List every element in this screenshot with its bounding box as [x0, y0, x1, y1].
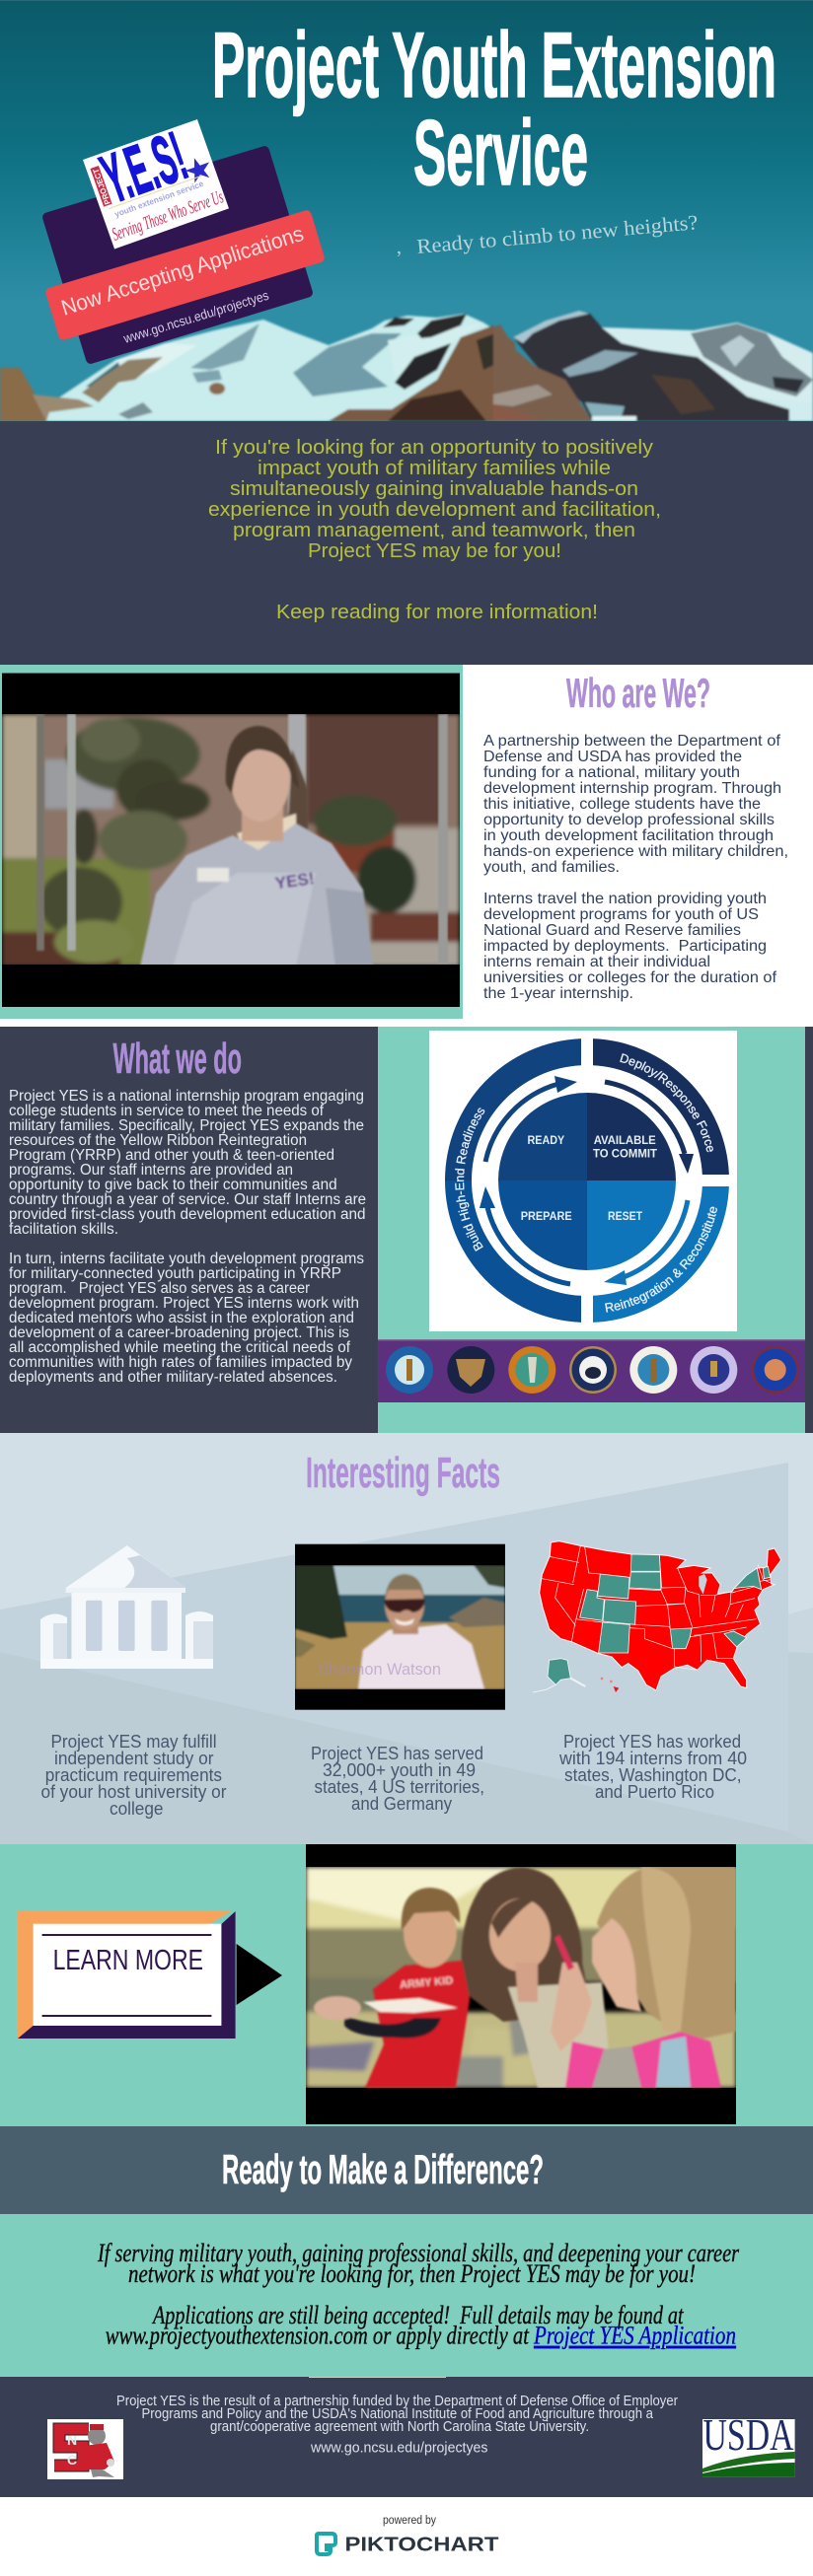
intro text: impact youth of military families while: [258, 458, 611, 479]
footer text: Programs and Policy and the USDA's National Institute of Food and Agriculture through a: [142, 2406, 654, 2422]
text: who are we: youth, and families.: [483, 859, 620, 876]
text: what we do: dedicated mentors who assist in the exploration and: [9, 1310, 354, 1326]
fact text: university credit: college: [110, 1799, 164, 1819]
fact text: university credit: independent study or: [54, 1749, 213, 1768]
chart: readiness cycle: [429, 1031, 737, 1331]
panel: footer: [0, 2377, 813, 2497]
text: what we do: Project YES is a national internship program engaging: [9, 1088, 364, 1105]
intro text: [208, 437, 661, 623]
text: who are we: development internship program. Through: [483, 780, 781, 797]
fact text: interns: states, Washington DC,: [564, 1765, 742, 1785]
boy: [365, 1961, 470, 2088]
title: [212, 13, 776, 204]
text: what we do: country through a year of service. Our staff Interns are: [9, 1191, 366, 1208]
logo: Project YES: Serving Those Who Serve Us: [110, 186, 226, 246]
callout: learn more: [18, 1911, 236, 2039]
intro text: If you're looking for an opportunity to positively: [215, 437, 653, 459]
intro text: simultaneously gaining invaluable hands-on: [230, 478, 638, 500]
text: call to action: [97, 2239, 740, 2350]
military seals band: [378, 1339, 805, 1402]
fact text: university credit: practicum requirements: [45, 1765, 222, 1785]
panel: learn more: [0, 1844, 813, 2126]
fact text: youth served: states, 4 US territories,: [314, 1777, 484, 1797]
fact text: youth served: 32,000+ youth in 49: [323, 1760, 476, 1780]
state borders: [542, 1545, 775, 1670]
video still: intern in sweatshirt: [2, 673, 460, 1007]
logo: Project YES: Y.E.S!: [93, 117, 196, 217]
text: who are we: Interns travel the nation providing youth: [483, 891, 767, 907]
fact text: interns: [558, 1732, 747, 1802]
text: call to action: www.projectyouthextension.com or apply directly at: [106, 2322, 530, 2350]
map: states served: [533, 1541, 781, 1692]
seal: air force reserve: [690, 1346, 737, 1394]
text: who are we: National Guard and Reserve families: [483, 922, 741, 939]
logo: Project YES: PROJECT: [92, 168, 112, 206]
video still: intern with children: ARMY KID: [400, 1974, 454, 1991]
seal: navy: [569, 1346, 617, 1394]
logo: NC State: C: [67, 2452, 77, 2468]
text: what we do: [9, 1088, 366, 1386]
text: who are we: the 1-year internship.: [483, 985, 633, 1002]
seal: army reserve: [447, 1346, 494, 1394]
woman: [462, 1868, 592, 2022]
badge url: www.go.ncsu.edu/projectyes: [121, 288, 270, 346]
panel: video still and who are we: [0, 665, 813, 1027]
fact text: youth served: and Germany: [351, 1794, 452, 1814]
text: what we do: programs. Our staff interns are provided an: [9, 1162, 293, 1179]
intro panel: [0, 421, 813, 665]
text: what we do: development of a career-broadening project. This is: [9, 1324, 349, 1341]
fact text: interns: Project YES has worked: [563, 1732, 741, 1752]
text: what we do: all accomplished while meeting the critical needs of: [9, 1339, 351, 1356]
hero panel: [0, 0, 813, 421]
text: what we do: In turn, interns facilitate youth development programs: [9, 1251, 364, 1267]
cycle arrows: [480, 1076, 694, 1285]
ring labels: Reintegration & Reconstitute: [605, 1207, 717, 1313]
text: what we do: provided first-class youth development education and: [9, 1206, 365, 1223]
seal: coast guard: [752, 1346, 799, 1394]
text: what we do: for military-connected youth participating in YRRP: [9, 1265, 341, 1282]
seal: air national guard: [629, 1346, 677, 1394]
fact text: university credit: Project YES may fulfill: [51, 1732, 217, 1752]
quadrant labels: READY: [527, 1135, 564, 1147]
text: what we do: development program. Project YES interns work with: [9, 1295, 359, 1312]
quadrant labels: AVAILABLE: [594, 1135, 656, 1147]
intro text: program management, and teamwork, then: [233, 520, 635, 541]
text: who are we: opportunity to develop professional skills: [483, 812, 775, 828]
badge banner: Now Accepting Applications: [58, 221, 307, 321]
intro text: experience in youth development and facilitation,: [208, 499, 661, 521]
arrow: [237, 1944, 282, 2005]
powered by: powered by: [383, 2515, 436, 2527]
heading: interesting facts: Interesting Facts: [306, 1449, 500, 1497]
badge card: [41, 109, 326, 365]
text: who are we: development programs for youth of US: [483, 906, 759, 923]
panel: what we do: [0, 1027, 813, 1433]
ring labels: Deploy/Response Force: [620, 1053, 713, 1152]
heading: ready to make a difference: Ready to Make a Difference?: [222, 2146, 544, 2192]
text: what we do: program. Project YES also serves as a career: [9, 1280, 310, 1297]
girl: [597, 1867, 736, 2041]
text: who are we: interns remain at their individual: [483, 954, 710, 970]
quadrant labels: TO COMMIT: [593, 1148, 657, 1160]
text: who are we: Defense and USDA has provided the: [483, 749, 742, 765]
video still: intern at beach: Shannon Watson: [318, 1660, 441, 1679]
text: who are we: impacted by deployments. Participating: [483, 938, 767, 955]
text: who are we: in youth development facilitation through: [483, 827, 774, 844]
mountains: [0, 311, 813, 421]
footer text: [116, 2394, 678, 2457]
fact text: interns: and Puerto Rico: [595, 1782, 714, 1802]
text: what we do: college students in service to meet the needs of: [9, 1103, 325, 1119]
title: Service: [413, 101, 588, 204]
intro text: Project YES may be for you!: [308, 540, 561, 562]
panel: call to action: [0, 2214, 813, 2377]
footer text: www.go.ncsu.edu/projectyes: [310, 2441, 487, 2457]
footer text: grant/cooperative agreement with North Carolina State University.: [210, 2419, 589, 2435]
fact text: interns: with 194 interns from 40: [558, 1749, 747, 1768]
video still: intern at beach: [295, 1544, 505, 1710]
panel: ready to make a difference: [0, 2126, 813, 2214]
logo: Project YES: youth extension service: [113, 179, 205, 219]
text: who are we: A partnership between the Department of: [483, 733, 781, 750]
text: who are we: this initiative, college students have the: [483, 796, 761, 813]
text: who are we: funding for a national, military youth: [483, 764, 740, 781]
text: call to action: network is what you're looking for, then Project YES may be for you!: [128, 2259, 696, 2288]
tagline: ,: [396, 237, 402, 258]
outer ring segments: [445, 1038, 729, 1323]
text: what we do: military families. Specifically, Project YES expands the: [9, 1117, 364, 1134]
fact text: youth served: [311, 1744, 484, 1814]
text: what we do: facilitation skills.: [9, 1221, 118, 1238]
video still: intern with children: [306, 1844, 736, 2124]
logo: Project YES: [79, 109, 229, 249]
fact text: youth served: Project YES has served: [311, 1744, 483, 1763]
ring labels: Build High-End Readiness: [455, 1108, 485, 1252]
text: what we do: resources of the Yellow Ribbon Reintegration: [9, 1132, 307, 1149]
text: call to action: Project YES Application: [533, 2322, 736, 2350]
center quadrants: [498, 1093, 676, 1270]
text: what we do: Program (YRRP) and other youth & teen-oriented: [9, 1147, 334, 1164]
logo: NC State: [47, 2419, 123, 2479]
text: who are we: [483, 733, 788, 1002]
footer text: Project YES is the result of a partnership funded by the Department of Defense Office of Employer: [116, 2394, 678, 2409]
fact text: university credit: of your host university or: [41, 1782, 227, 1802]
panel: interesting facts: [0, 1433, 813, 1844]
video still: intern in sweatshirt: YES!: [274, 869, 316, 893]
states with no interns: [548, 1554, 771, 1684]
quadrant labels: [521, 1135, 657, 1223]
panel: piktochart credit: [0, 2497, 813, 2576]
alaska and hawaii islands: [533, 1674, 619, 1692]
logo: USDA: [702, 2409, 795, 2477]
piktochart wordmark: PIKTOCHART: [345, 2535, 499, 2556]
intro text: Keep reading for more information!: [276, 602, 598, 623]
text: who are we: universities or colleges for the duration of: [483, 969, 777, 986]
seal: marine corps: [508, 1346, 555, 1394]
icon: university building: [40, 1545, 213, 1669]
callout: learn more: LEARN MORE: [53, 1945, 203, 1976]
text: who are we: hands-on experience with military children,: [483, 843, 788, 860]
logo: NC State: N: [67, 2432, 77, 2448]
quadrant labels: RESET: [608, 1211, 642, 1223]
icon: piktochart: [317, 2534, 335, 2554]
ring labels: [455, 1053, 717, 1313]
text: what we do: communities with high rates of families impacted by: [9, 1354, 352, 1371]
text: what we do: opportunity to give back to their communities and: [9, 1177, 337, 1193]
quadrant labels: PREPARE: [521, 1211, 572, 1223]
text: what we do: deployments and other military-related absences.: [9, 1369, 337, 1386]
tagline: Ready to climb to new heights?: [415, 210, 699, 258]
seal: army national guard: [386, 1346, 433, 1394]
heading: what we do: What we do: [112, 1035, 242, 1083]
fact text: university credit: [41, 1732, 227, 1819]
